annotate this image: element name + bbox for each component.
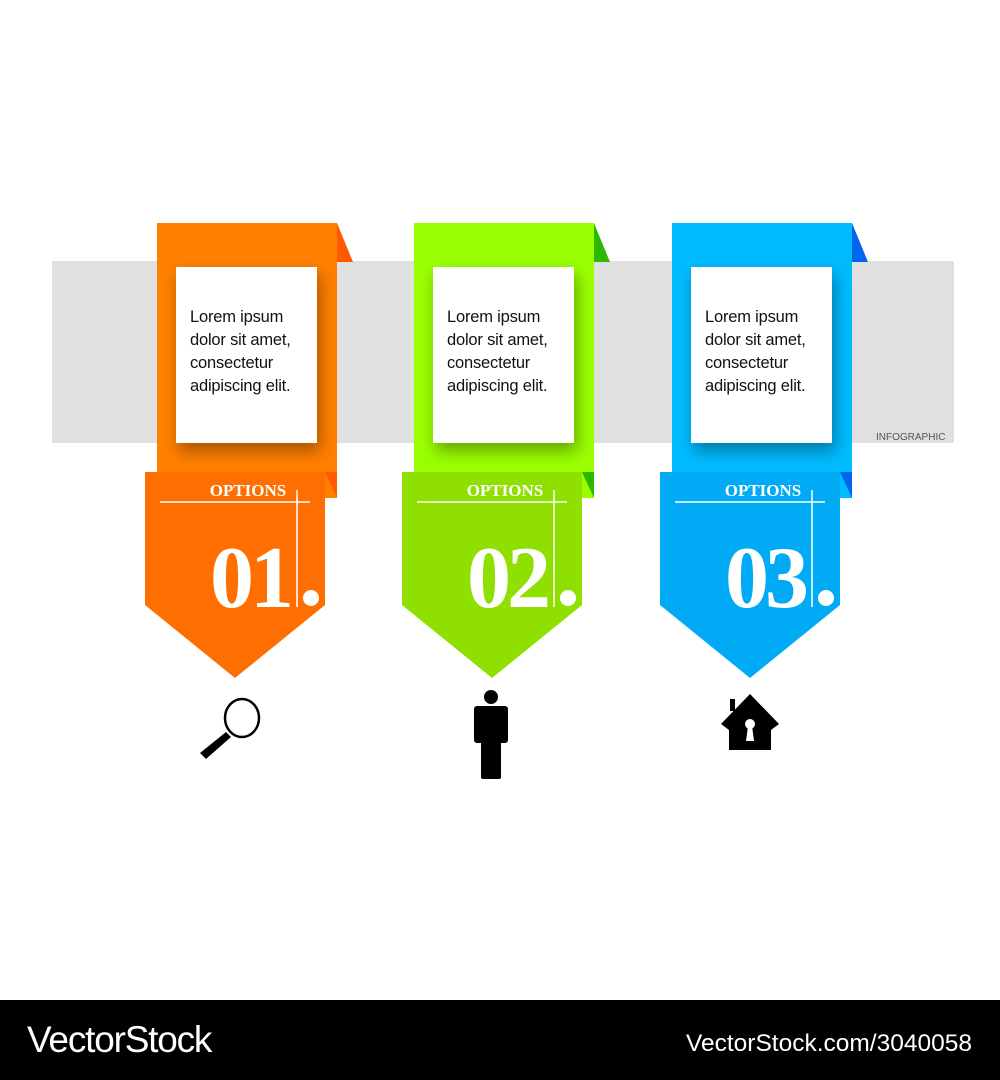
panel: option 02: OPTIONS xyxy=(467,481,543,500)
text block 02: dolor sit amet, xyxy=(447,331,548,349)
text block 01: Lorem ipsum xyxy=(190,308,283,326)
panel: option 03: 03 xyxy=(725,530,806,627)
text block 01: dolor sit amet, xyxy=(190,331,291,349)
panel: option 02 xyxy=(402,223,610,678)
text block 03: consectetur xyxy=(705,354,789,372)
text block 03: dolor sit amet, xyxy=(705,331,806,349)
footer url: VectorStock.com/3040058 xyxy=(686,1030,972,1057)
panel: option 01 xyxy=(145,223,353,678)
text block 03: Lorem ipsum xyxy=(705,308,798,326)
label: infographic: INFOGRAPHIC xyxy=(876,432,945,443)
gray band xyxy=(52,261,954,443)
panel: option 01: OPTIONS xyxy=(210,481,286,500)
text block 03: adipiscing elit. xyxy=(705,377,805,395)
text block 02: adipiscing elit. xyxy=(447,377,547,395)
text block 02: consectetur xyxy=(447,354,531,372)
icon: person xyxy=(474,690,508,779)
panel: option 03: OPTIONS xyxy=(725,481,801,500)
footer bar xyxy=(0,1000,1000,1080)
footer brand: VectorStock xyxy=(27,1019,213,1060)
text block 02: Lorem ipsum xyxy=(447,308,540,326)
panel: option 03 xyxy=(660,223,868,678)
panel: option 02: 02 xyxy=(467,530,548,627)
icon: house xyxy=(721,694,779,750)
icon: magnifier xyxy=(200,699,259,759)
text block 01: consectetur xyxy=(190,354,274,372)
text block 01: adipiscing elit. xyxy=(190,377,290,395)
panel: option 01: 01 xyxy=(210,530,290,627)
